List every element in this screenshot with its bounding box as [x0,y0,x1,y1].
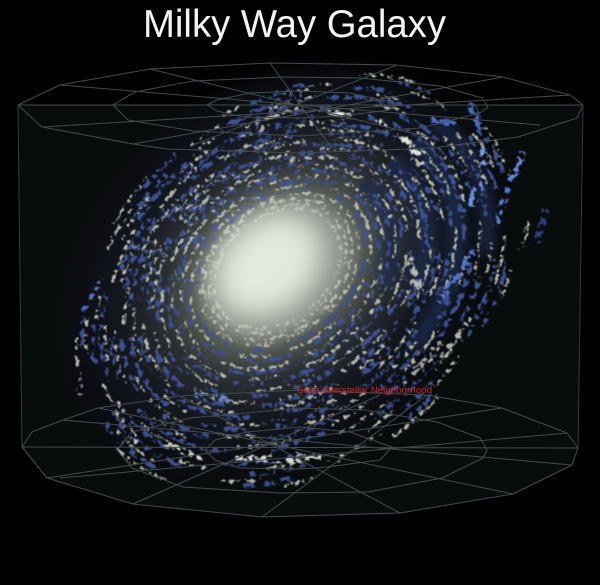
bottom disc rim [22,390,578,517]
top disc middle ring [113,77,488,136]
top disc spokes [18,63,582,146]
bright star patches [80,106,545,462]
top disc rim [18,63,583,153]
bottom disc spokes [22,395,578,517]
bottom disc wireframe [22,390,578,517]
top disc inner ring [207,91,395,118]
top disc wireframe [18,63,583,153]
spiral arm blue wash [27,21,561,541]
cylinder side edges [18,105,583,448]
galaxy core [192,191,344,339]
bottom disc inner ring [205,427,392,469]
label: solar interstellar neighborhood: Solar Interstellar Neighborhood [297,385,432,395]
title: Milky Way Galaxy [143,3,446,46]
cylinder interior shade [18,105,582,517]
bottom disc middle ring [117,408,487,493]
